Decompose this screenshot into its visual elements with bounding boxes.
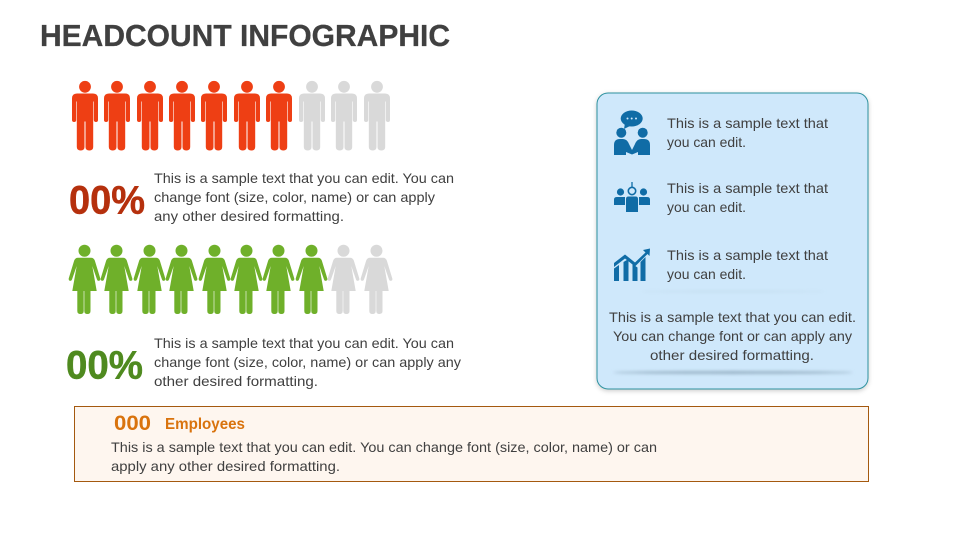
panel: employees	[74, 406, 868, 482]
text block: women description: other desired formatting.	[154, 373, 318, 389]
pictogram: women headcount row	[69, 245, 392, 314]
icon: two people talking	[614, 110, 650, 155]
title: HEADCOUNT INFOGRAPHIC	[40, 18, 450, 53]
employee count: 000	[114, 412, 151, 435]
text: panel summary	[609, 309, 856, 363]
text: employees description: apply any other desired formatting.	[111, 458, 340, 474]
text block: women description: This is a sample text that you can edit. You can	[154, 335, 454, 351]
text block: men description	[154, 170, 454, 224]
employees label: Employees	[165, 416, 245, 433]
text block: men description: This is a sample text that you can edit. You can	[154, 170, 454, 186]
percentage: women: 00%	[66, 344, 143, 388]
text block: men description: any other desired formatting.	[154, 208, 344, 224]
text: item 1: you can edit.	[667, 134, 746, 150]
text: item 1	[667, 115, 828, 150]
panel: blue key points	[597, 93, 868, 389]
text: employees description: This is a sample text that you can edit. You can change font (size, color, name) or can	[111, 439, 657, 455]
text block: women description: change font (size, color, name) or can apply any	[154, 354, 461, 370]
icon: team with leader	[614, 182, 650, 212]
text: employees description	[111, 439, 657, 474]
text: panel summary: You can change font or can apply any	[613, 328, 852, 344]
pictogram: men headcount row	[72, 81, 390, 150]
text: panel summary: other desired formatting.	[650, 347, 814, 363]
text block: men description: change font (size, color, name) or can apply	[154, 189, 435, 205]
text: item 2	[667, 180, 828, 215]
text block: women description	[154, 335, 461, 389]
text: item 2: you can edit.	[667, 199, 746, 215]
text: item 1: This is a sample text that	[667, 115, 828, 131]
percentage: men: 00%	[69, 178, 145, 222]
text: panel summary: This is a sample text that you can edit.	[609, 309, 856, 325]
text: item 3	[667, 247, 828, 282]
text: item 2: This is a sample text that	[667, 180, 828, 196]
icon: rising bar chart	[614, 248, 650, 281]
text: item 3: you can edit.	[667, 266, 746, 282]
text: item 3: This is a sample text that	[667, 247, 828, 263]
